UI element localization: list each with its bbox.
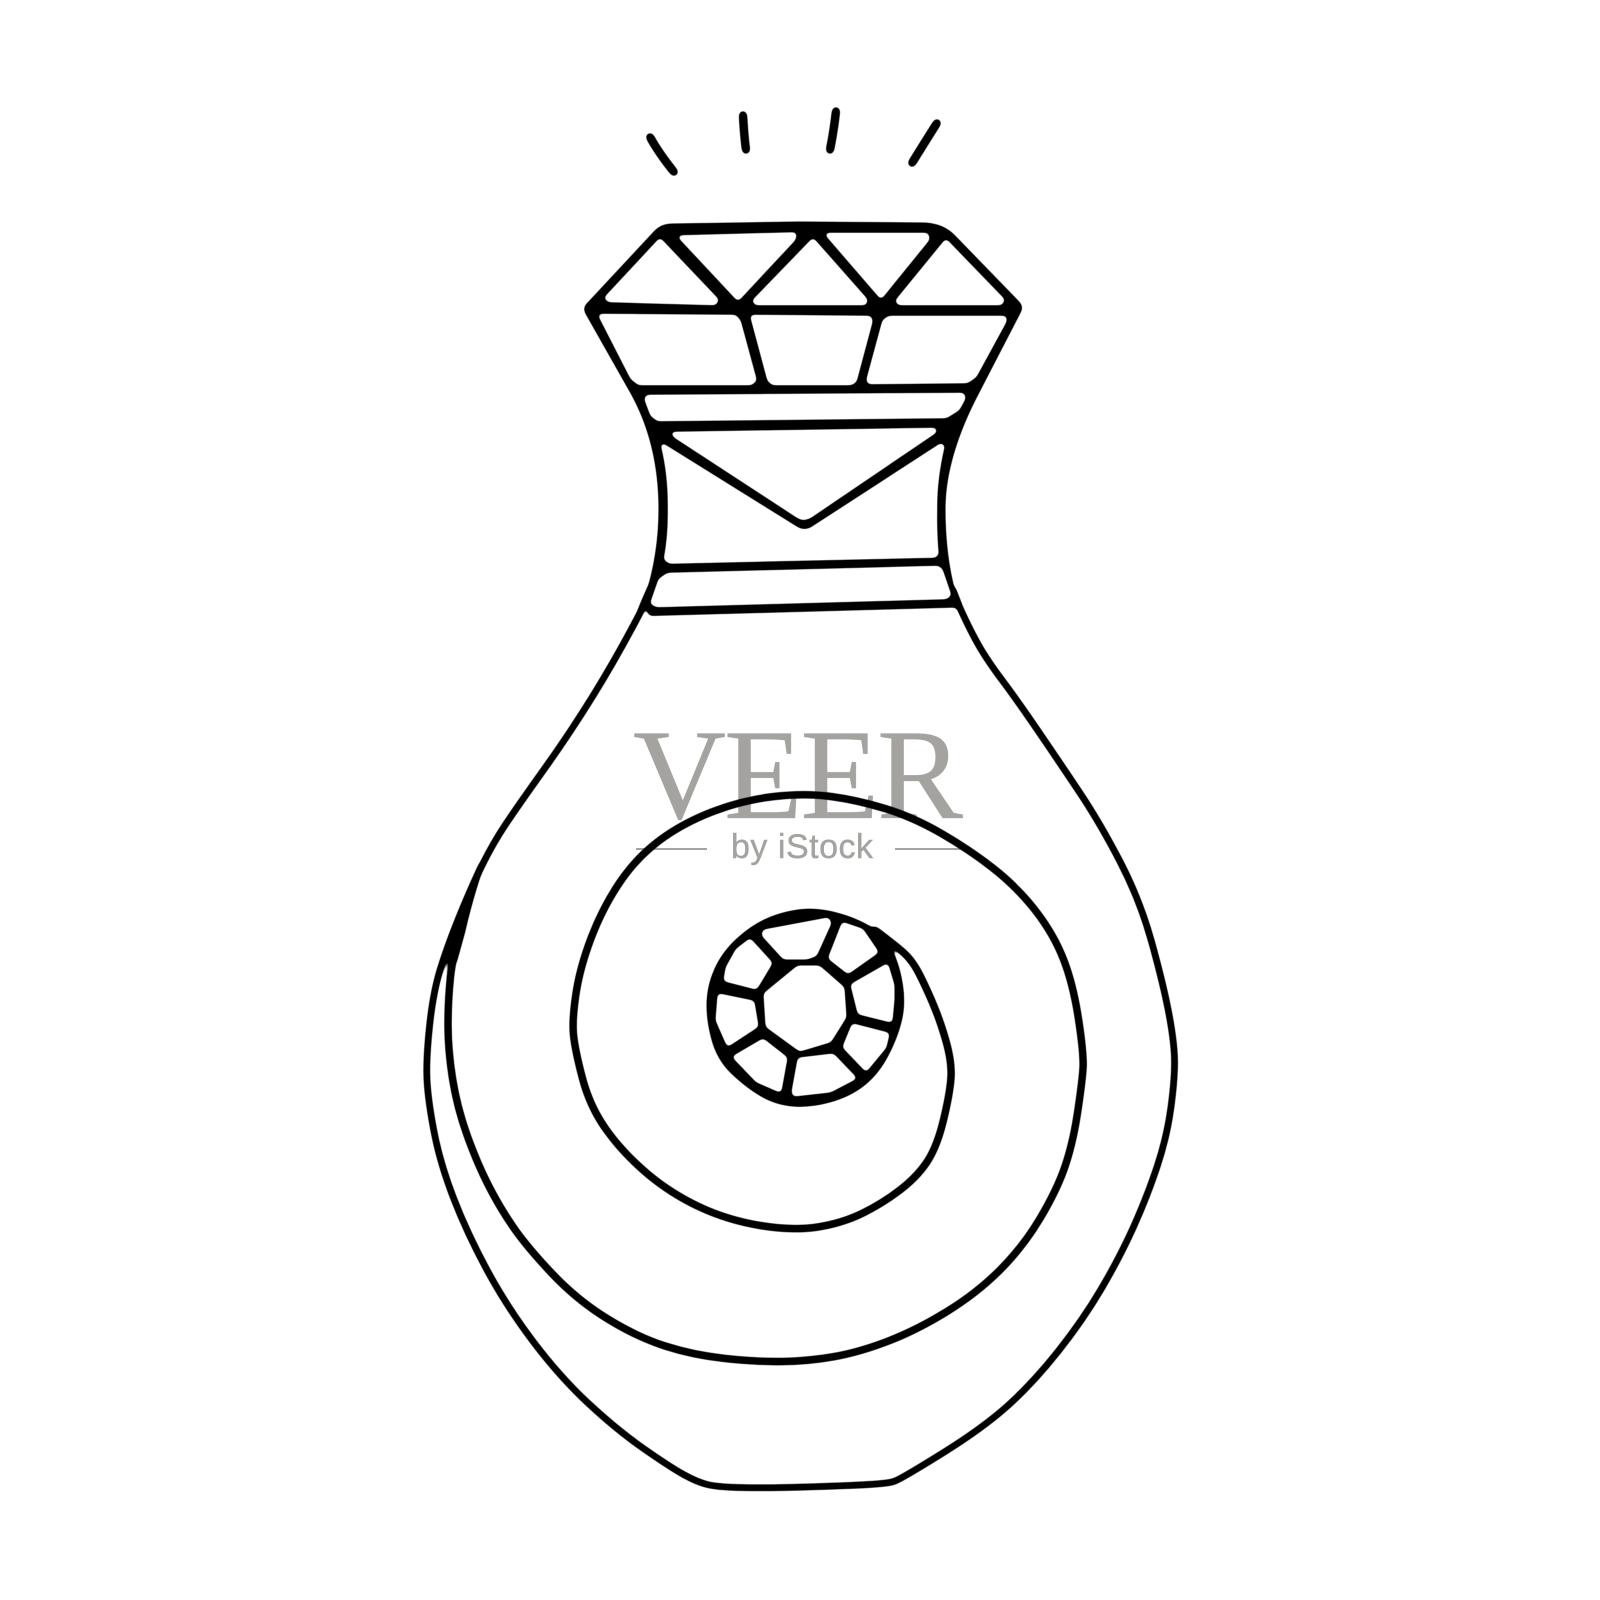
gem facets — [717, 919, 893, 1095]
gem: round cut ring — [706, 909, 904, 1107]
sparkle lines above diamond — [650, 111, 937, 172]
bottle body outline — [427, 585, 1175, 1488]
watermark: VEER by iStock: by iStock — [731, 828, 874, 866]
upper neck band — [646, 394, 964, 420]
diamond pavilion facets — [600, 316, 1005, 384]
neck panel — [662, 445, 943, 562]
neck triangle — [673, 430, 935, 518]
lower neck band — [652, 568, 950, 606]
watermark: VEER by iStock: VEER — [633, 703, 963, 846]
diamond crown facets — [606, 234, 1003, 304]
diamond stopper and neck — [584, 222, 1022, 616]
spiral decoration line — [443, 795, 1083, 1362]
